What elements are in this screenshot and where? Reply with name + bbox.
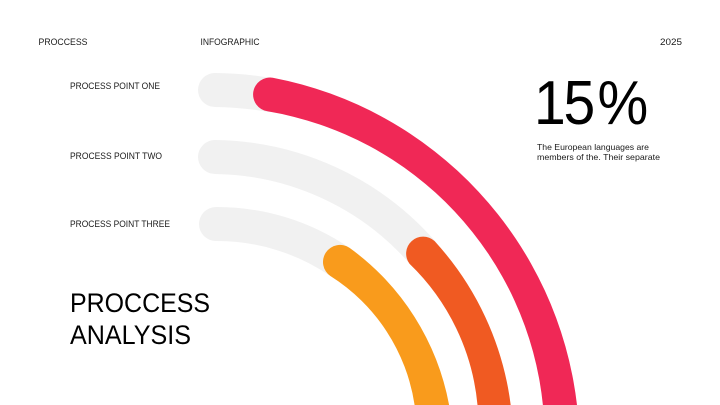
arc value: three, amber	[323, 245, 449, 405]
stat description: The European languages are	[537, 142, 649, 152]
title: PROCCESS	[70, 288, 210, 318]
arc chart	[215, 77, 577, 405]
label: process point two: PROCESS POINT TWO	[70, 151, 162, 161]
title	[70, 288, 210, 350]
header: year: 2025	[660, 37, 682, 47]
arc track: one	[215, 90, 270, 95]
arc value: two, orange-red	[406, 237, 511, 405]
arc track: three	[216, 224, 340, 262]
title: ANALYSIS	[70, 320, 191, 350]
header: infographic: INFOGRAPHIC	[200, 37, 260, 47]
arc track: two	[215, 157, 423, 253]
header: proccess: PROCCESS	[38, 37, 88, 47]
label: process point one: PROCESS POINT ONE	[70, 81, 160, 91]
stat: 15 percent: 15%	[534, 68, 648, 138]
stat description	[537, 142, 660, 162]
label: process point three: PROCESS POINT THREE	[70, 219, 170, 229]
stat description: members of the. Their separate	[537, 152, 660, 162]
arc value: one, red	[253, 77, 577, 405]
